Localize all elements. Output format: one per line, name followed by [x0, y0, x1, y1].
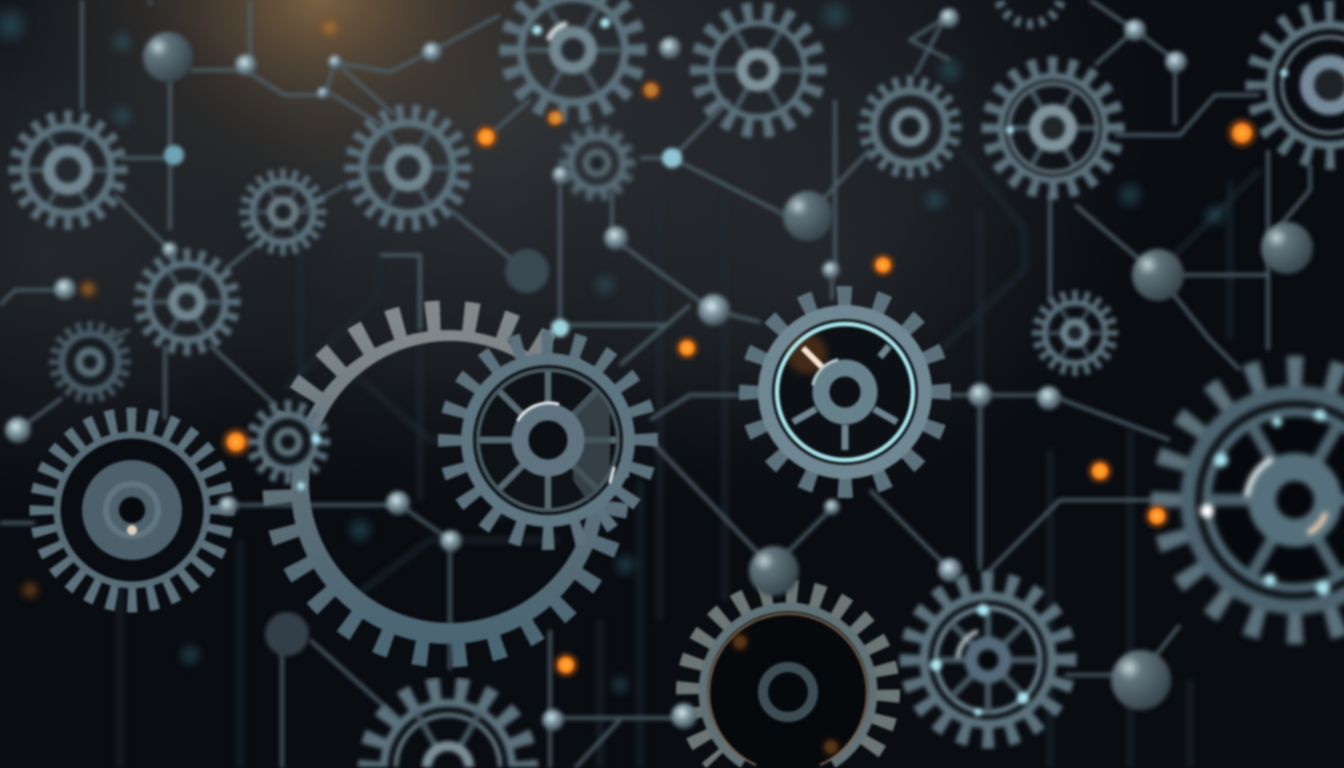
gear: bottom center copper ring — [688, 592, 888, 768]
gear: large far right — [1170, 375, 1344, 625]
gear: left small dark — [55, 327, 125, 397]
gear: small center top — [565, 131, 629, 195]
gear: top center — [510, 0, 636, 113]
gear: small overlapping — [253, 407, 323, 490]
gear: bottom right — [910, 582, 1066, 738]
gear: bottom left partial — [370, 689, 526, 767]
gear: top left — [17, 119, 119, 221]
gear: far top right — [1257, 12, 1344, 158]
gear: highlighted center — [751, 298, 939, 486]
gear: small upper left — [246, 175, 320, 249]
gear: top edge small — [998, 0, 1062, 24]
gear: large lower left — [42, 420, 222, 600]
gear: left middle — [141, 256, 233, 348]
gear: upper right — [991, 66, 1115, 190]
gear: center left main — [450, 342, 646, 538]
orange glowing lights — [219, 77, 1260, 680]
gear: top center right — [700, 12, 816, 128]
gear: upper center left — [354, 114, 462, 222]
gear: right middle small — [1038, 296, 1112, 370]
gear: very large open ring — [269, 307, 623, 661]
gear: upper right small — [866, 83, 954, 171]
